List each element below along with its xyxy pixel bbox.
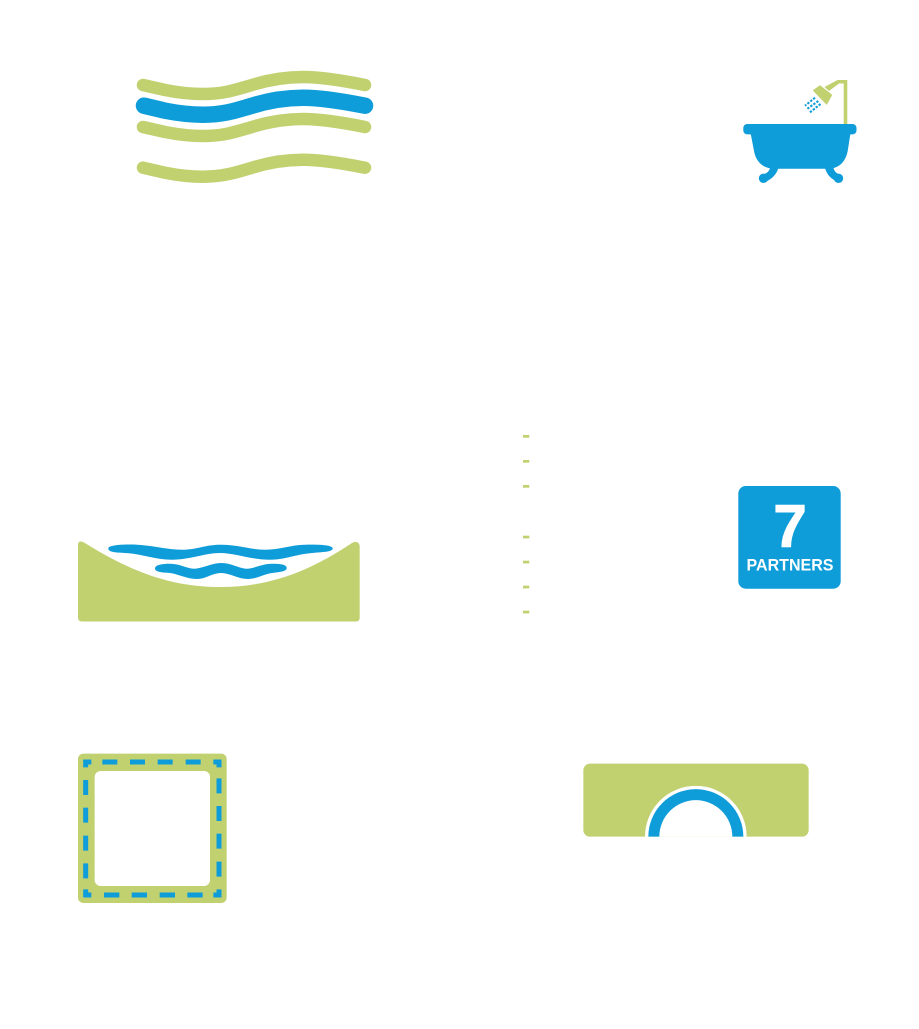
shower pipe and neck (824, 80, 847, 124)
badge label: PARTNERS (746, 557, 834, 575)
top green wave (143, 77, 365, 94)
bottom green wave (143, 160, 365, 177)
green embankment (583, 764, 809, 837)
icon: bathtub with shower (743, 80, 856, 183)
badge: 7 partners (738, 486, 841, 589)
blue dashed line (86, 762, 219, 895)
icon: road over culvert arch (583, 764, 809, 837)
green frame (78, 754, 227, 903)
icon: river waves (143, 77, 365, 177)
badge background (738, 486, 841, 589)
bullet list markers (523, 435, 529, 613)
badge number: 7 (773, 493, 807, 560)
left foot (761, 168, 778, 182)
lower water band (155, 563, 287, 579)
middle green wave (143, 119, 365, 136)
shower drops (805, 98, 820, 112)
right foot (825, 168, 842, 182)
icon: square frame with dashed boundary (78, 754, 227, 903)
white centre (95, 771, 210, 886)
blue arch ring (648, 789, 743, 837)
bathtub basin (750, 130, 851, 169)
icon: water in valley (78, 541, 360, 622)
shower head (813, 86, 832, 104)
white arch outline (645, 786, 747, 837)
valley ground (78, 541, 360, 622)
blue wave (144, 98, 365, 115)
bathtub rim (743, 124, 856, 134)
upper water band (108, 544, 333, 560)
